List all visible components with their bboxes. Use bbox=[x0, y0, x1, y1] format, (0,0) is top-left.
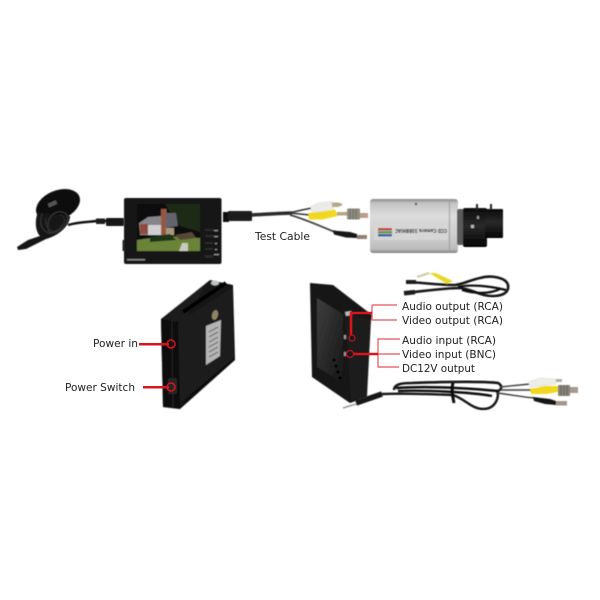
connection labels: Audio output (RCA) bbox=[402, 300, 503, 313]
back of monitor, left view bbox=[161, 280, 235, 409]
connection labels: DC12V output bbox=[402, 362, 476, 375]
back sticker bbox=[206, 320, 221, 365]
coiled cable, bottom bbox=[343, 382, 534, 409]
callout: power switch bbox=[65, 381, 175, 394]
test cable label: Test Cable bbox=[254, 230, 310, 243]
connection labels: Video input (BNC) bbox=[402, 348, 496, 361]
input connector lines bbox=[346, 339, 400, 367]
monitor buttons bbox=[205, 229, 219, 258]
callout: power in: Power in bbox=[93, 337, 138, 350]
RCA and BNC plugs on test cable bbox=[308, 202, 368, 239]
monitor screen photo of house bbox=[137, 204, 200, 251]
connection callouts bbox=[346, 300, 503, 375]
car charger with coiled cable bbox=[17, 183, 124, 250]
coiled cable, top bbox=[404, 273, 508, 296]
CCD camera bbox=[370, 199, 503, 253]
callout: power switch: Power Switch bbox=[65, 381, 135, 394]
test cable with connectors bbox=[223, 208, 335, 232]
side of monitor, right view bbox=[310, 283, 372, 403]
callout: power in bbox=[93, 337, 175, 350]
camera label: CCD Camera 33BBHIAC bbox=[395, 227, 447, 233]
output connector lines bbox=[349, 305, 397, 341]
plugs on bottom cable bbox=[528, 378, 578, 406]
connection labels: Video output (RCA) bbox=[402, 314, 503, 327]
connection labels bbox=[402, 300, 503, 375]
connection labels: Audio input (RCA) bbox=[402, 334, 496, 347]
camera lens bbox=[463, 204, 503, 247]
monitor front view bbox=[122, 198, 222, 264]
